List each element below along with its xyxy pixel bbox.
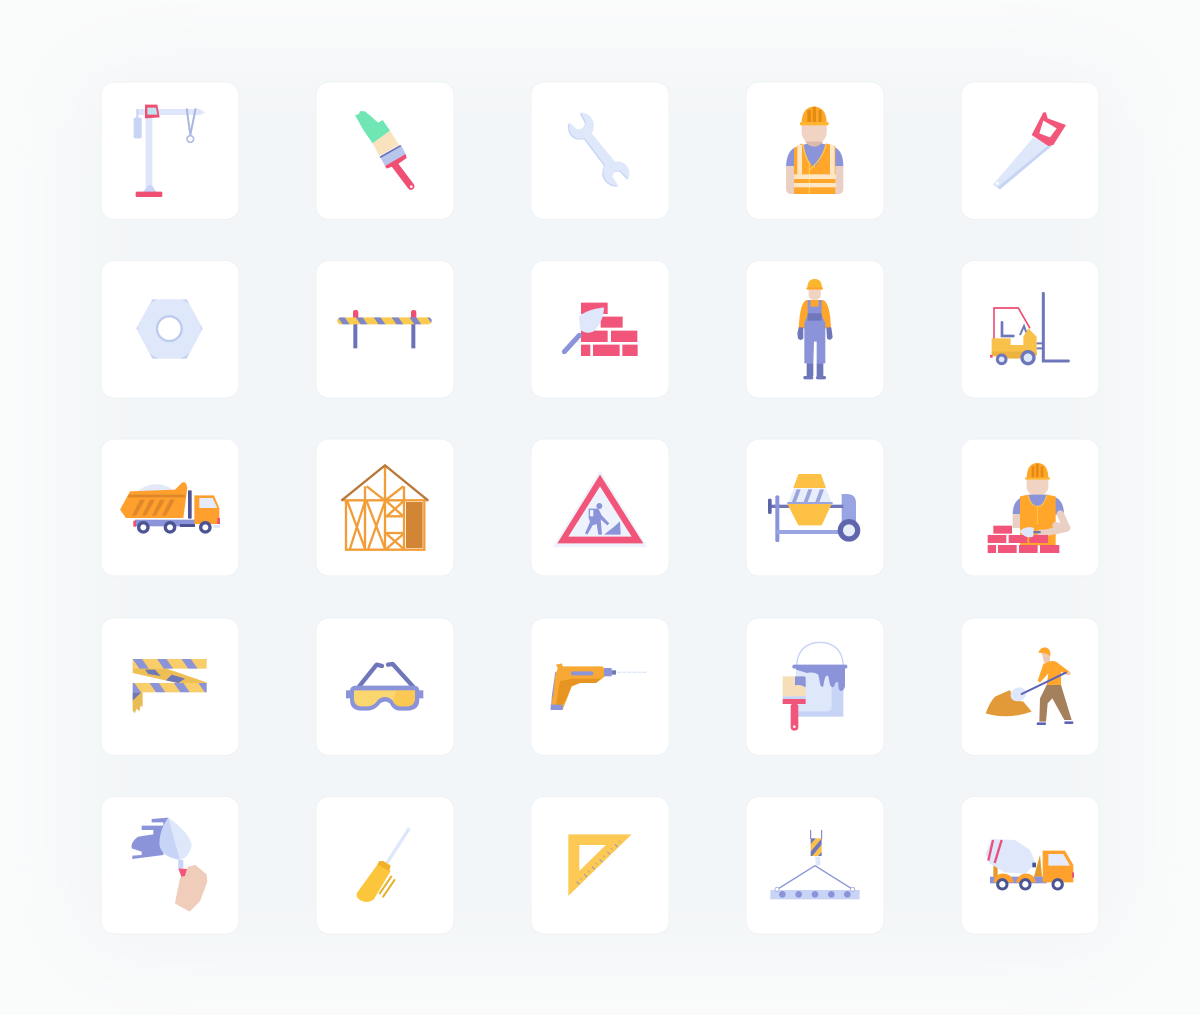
icon: crane lifting beam (770, 830, 860, 899)
icon: concrete mixer (768, 474, 858, 542)
card: tower crane (101, 82, 239, 220)
icon: house frame (341, 465, 428, 550)
icon: wrench (568, 112, 629, 187)
card: house frame (316, 439, 454, 576)
icon: worker with shovel (986, 647, 1073, 725)
icon: tower crane (134, 105, 205, 197)
card: wrench (531, 82, 669, 220)
card: screwdriver (316, 796, 454, 934)
card: worker with safety vest (746, 82, 884, 220)
card: safety goggles (316, 618, 454, 756)
card: bricks and trowel (531, 260, 669, 398)
icon: screwdriver (357, 828, 409, 902)
card: worker in overalls (746, 260, 884, 398)
card: paint bucket and brush (746, 618, 884, 756)
icon: set square (568, 834, 632, 896)
card: set square (531, 796, 669, 934)
card: concrete mixer (746, 439, 884, 576)
card: cement mixer truck (961, 796, 1099, 934)
icon: cement mixer truck (986, 839, 1074, 889)
card: crane lifting beam (746, 796, 884, 934)
card: caution tape (101, 618, 239, 756)
card: worker with shovel (961, 618, 1099, 756)
icon: trowel and hand (132, 818, 206, 910)
icon: bricks and trowel (564, 303, 638, 356)
icon: road barrier (337, 310, 432, 348)
card: forklift (961, 260, 1099, 398)
card: bricklayer (961, 439, 1099, 576)
icon: hex nut (136, 297, 203, 360)
card: warning sign (531, 439, 669, 576)
icon: caution tape (133, 659, 207, 713)
card: trowel and hand (101, 796, 239, 934)
icon: paint brush (355, 111, 413, 188)
icon: safety goggles (346, 664, 423, 711)
icon: power drill (551, 663, 647, 710)
card: paint brush (316, 82, 454, 220)
icon: warning sign (553, 470, 647, 547)
card: dump truck (101, 439, 239, 576)
card: hex nut (101, 260, 239, 398)
icon: hand saw (993, 112, 1066, 189)
icon: worker with safety vest (786, 107, 843, 194)
card: road barrier (316, 260, 454, 398)
icon: forklift (990, 293, 1068, 364)
icon: worker in overalls (797, 279, 833, 379)
icon: bricklayer (988, 463, 1067, 553)
card: hand saw (961, 82, 1099, 220)
icon: dump truck (120, 482, 220, 532)
icon: paint bucket and brush (783, 642, 847, 731)
card: power drill (531, 618, 669, 756)
